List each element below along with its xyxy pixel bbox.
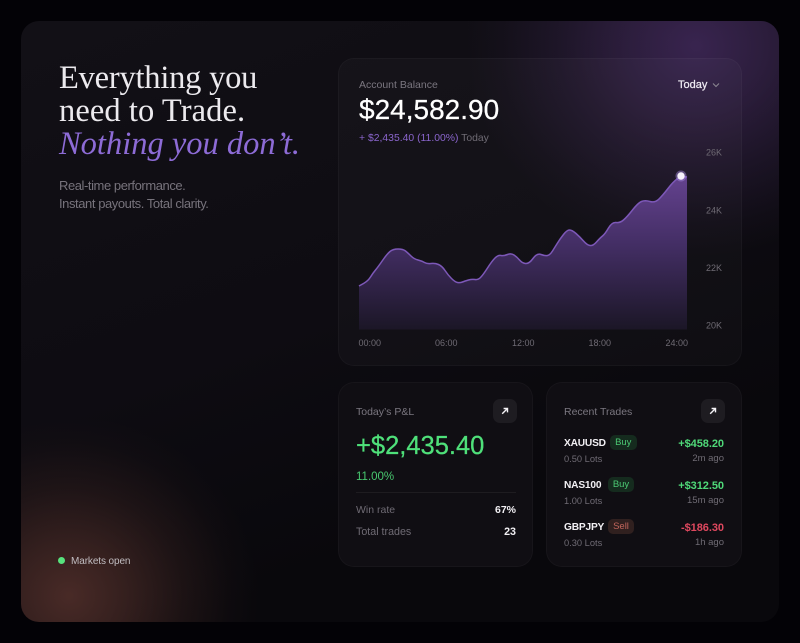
trade: XAUUSD: XAUUSD xyxy=(564,438,606,449)
trades heading: Recent Trades xyxy=(564,406,632,418)
x axis labels xyxy=(358,338,688,348)
trade: NAS100: 15m ago xyxy=(687,494,724,506)
stat: win rate xyxy=(356,504,516,516)
trade: NAS100 xyxy=(564,477,724,506)
y axis labels: 22K xyxy=(706,263,722,273)
trade: XAUUSD: Buy xyxy=(615,437,631,448)
panel: recent trades xyxy=(546,382,742,567)
chart area fill xyxy=(359,177,687,330)
stat: total trades: Total trades xyxy=(356,526,411,538)
P&L value: +$2,435.40 xyxy=(356,432,484,460)
P&L percent: 11.00% xyxy=(356,471,394,483)
headline: Everything you xyxy=(59,60,257,96)
x axis labels: 00:00 xyxy=(358,338,381,348)
balance value: $24,582.90 xyxy=(359,94,499,125)
icon: expand arrow xyxy=(701,399,725,423)
x axis labels: 24:00 xyxy=(666,338,688,348)
y axis labels xyxy=(706,148,722,330)
y axis labels: 26K xyxy=(706,148,722,158)
stat: total trades xyxy=(356,526,516,538)
trade: NAS100: Buy xyxy=(613,479,629,490)
trade: XAUUSD: 2m ago xyxy=(692,452,724,464)
stat: total trades: 23 xyxy=(504,526,516,538)
balance change: + $2,435.40 (11.00%) Today xyxy=(359,133,489,144)
balance label: Account Balance xyxy=(359,79,438,91)
trade: GBPJPY: Sell xyxy=(613,521,629,532)
subheading xyxy=(59,178,208,211)
trade: NAS100: NAS100 xyxy=(564,480,601,491)
area chart xyxy=(358,148,722,348)
panel: account balance xyxy=(338,58,742,366)
trade: NAS100: 1.00 Lots xyxy=(564,496,602,506)
x axis labels: 12:00 xyxy=(512,338,535,348)
stat: win rate: 67% xyxy=(495,504,516,516)
P&L heading: Today’s P&L xyxy=(356,406,414,418)
x axis labels: 18:00 xyxy=(588,338,611,348)
range selector: Today xyxy=(678,79,707,91)
headline: need to Trade. xyxy=(59,93,245,129)
icon: expand arrow xyxy=(493,399,517,423)
subheading: Real-time performance. xyxy=(59,178,185,193)
y axis labels: 20K xyxy=(706,320,722,330)
status label: Markets open xyxy=(71,556,130,567)
x axis labels: 06:00 xyxy=(435,338,458,348)
headline: Nothing you don’t. xyxy=(59,126,300,162)
trade: GBPJPY: -$186.30 xyxy=(681,522,724,534)
y axis labels: 24K xyxy=(706,206,722,216)
trade: XAUUSD xyxy=(564,435,724,464)
status dot xyxy=(58,557,65,564)
trade: GBPJPY xyxy=(564,519,724,548)
trade: GBPJPY: GBPJPY xyxy=(564,522,604,533)
trade: NAS100: +$312.50 xyxy=(678,480,724,492)
status: markets open xyxy=(58,556,130,567)
chart line xyxy=(359,177,687,286)
divider xyxy=(356,492,516,493)
headline xyxy=(58,60,300,162)
trade: XAUUSD: 0.50 Lots xyxy=(564,454,602,464)
stat: win rate: Win rate xyxy=(356,504,395,516)
trade: GBPJPY: 0.30 Lots xyxy=(564,538,602,548)
subheading: Instant payouts. Total clarity. xyxy=(59,196,208,211)
chart end point xyxy=(676,170,686,182)
trade: GBPJPY: 1h ago xyxy=(695,536,724,548)
panel: today's P&L xyxy=(338,382,533,567)
trade: XAUUSD: +$458.20 xyxy=(678,438,724,450)
